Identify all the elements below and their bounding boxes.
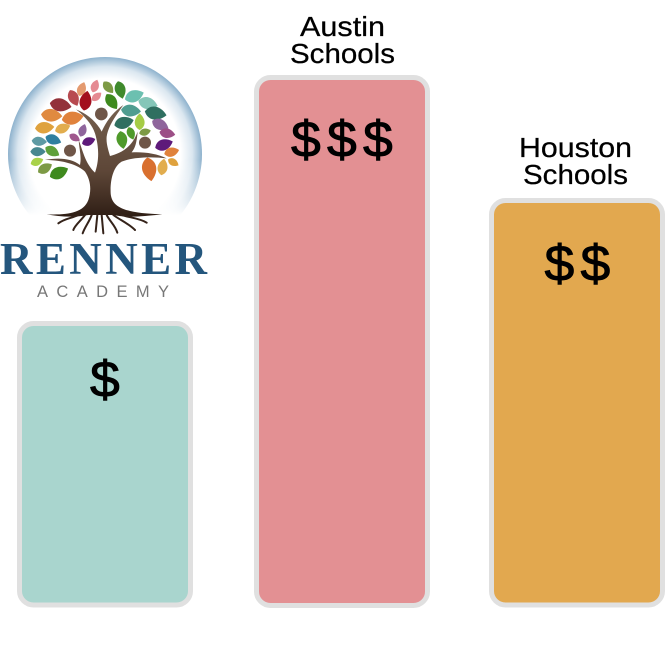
price symbol: one dollar: $ (90, 352, 120, 408)
logo subtitle: ACADEMY: ACADEMY (37, 283, 169, 301)
label: Austin Schools: Schools (290, 38, 395, 69)
logo tree (29, 78, 180, 233)
tree knots (64, 108, 151, 157)
label: Houston Schools: Schools (523, 159, 628, 190)
bar: Houston Schools (492, 200, 662, 605)
bar: first school (20, 324, 190, 605)
tree leaves (29, 78, 180, 182)
price symbol: three dollars: $$$ (291, 112, 393, 168)
label: Houston Schools: Houston (519, 132, 632, 163)
tree roots (58, 215, 147, 233)
logo wordmark: RENNER: RENNER (0, 234, 208, 284)
label: Austin Schools (290, 11, 395, 69)
label: Houston Schools (519, 132, 632, 190)
logo: Renner Academy (0, 57, 208, 301)
logo halo circle (5, 57, 205, 255)
bar: Austin Schools (256, 78, 428, 606)
label: Austin Schools: Austin (300, 11, 385, 42)
tree trunk and branches (45, 105, 167, 217)
price symbol: two dollars: $$ (544, 236, 610, 292)
